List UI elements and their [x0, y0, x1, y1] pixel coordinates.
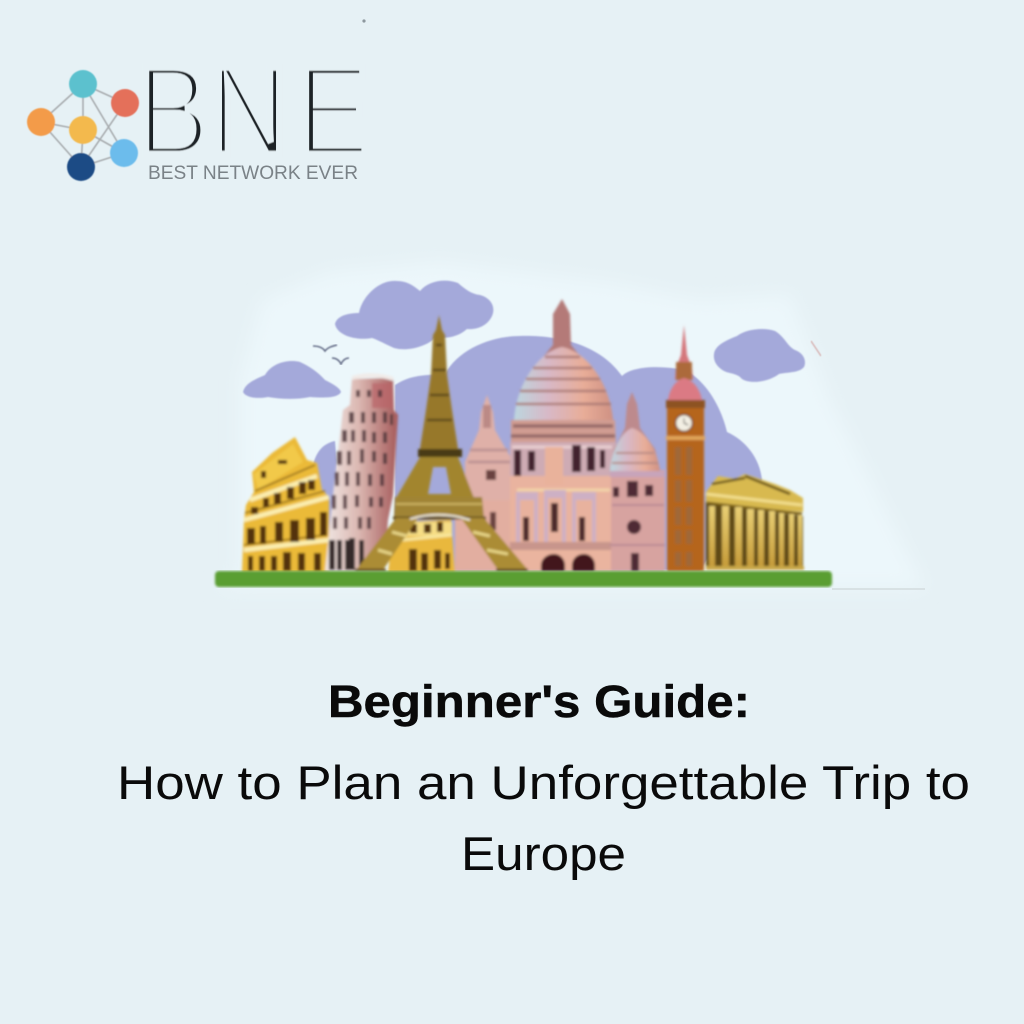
logo tagline: BEST NETWORK EVER	[148, 163, 358, 184]
logo: Best Network Ever	[27, 39, 369, 184]
main drum	[510, 420, 616, 460]
illustration: European landmarks	[215, 262, 925, 589]
main body	[510, 460, 615, 571]
right small dome	[611, 470, 665, 571]
cloud: large behind buildings	[395, 336, 762, 570]
landmark: Eiffel Tower	[355, 315, 528, 570]
landmark: Parthenon	[706, 474, 804, 570]
main dome	[514, 347, 613, 420]
subtitle	[117, 756, 970, 880]
landmark: second colosseum section	[388, 520, 455, 572]
small specks	[362, 19, 366, 23]
horizon line	[832, 588, 925, 590]
main dome spire	[544, 299, 580, 356]
birds	[313, 345, 349, 364]
subtitle line 1: How to Plan an Unforgettable Trip to	[117, 756, 970, 809]
landmark: Big Ben	[666, 325, 705, 571]
logo wordmark BNE: BNE	[137, 39, 369, 182]
landmark: Sacre-Coeur	[455, 299, 665, 571]
kite mark	[811, 341, 821, 356]
title: Beginner's Guide:	[328, 676, 750, 727]
grass ground	[215, 571, 832, 587]
pale halo behind landmarks	[215, 262, 925, 588]
cloud: right	[714, 329, 805, 382]
left small dome	[465, 395, 511, 500]
clouds	[243, 281, 805, 570]
arches	[541, 554, 565, 571]
landmark: Colosseum	[242, 437, 329, 572]
cloud: left	[243, 361, 341, 399]
cloud: top	[335, 281, 493, 349]
logo icon: network nodes	[27, 70, 139, 181]
subtitle line 2: Europe	[461, 827, 626, 880]
landmark: Leaning Tower of Pisa	[325, 375, 398, 571]
clock face	[676, 414, 692, 432]
